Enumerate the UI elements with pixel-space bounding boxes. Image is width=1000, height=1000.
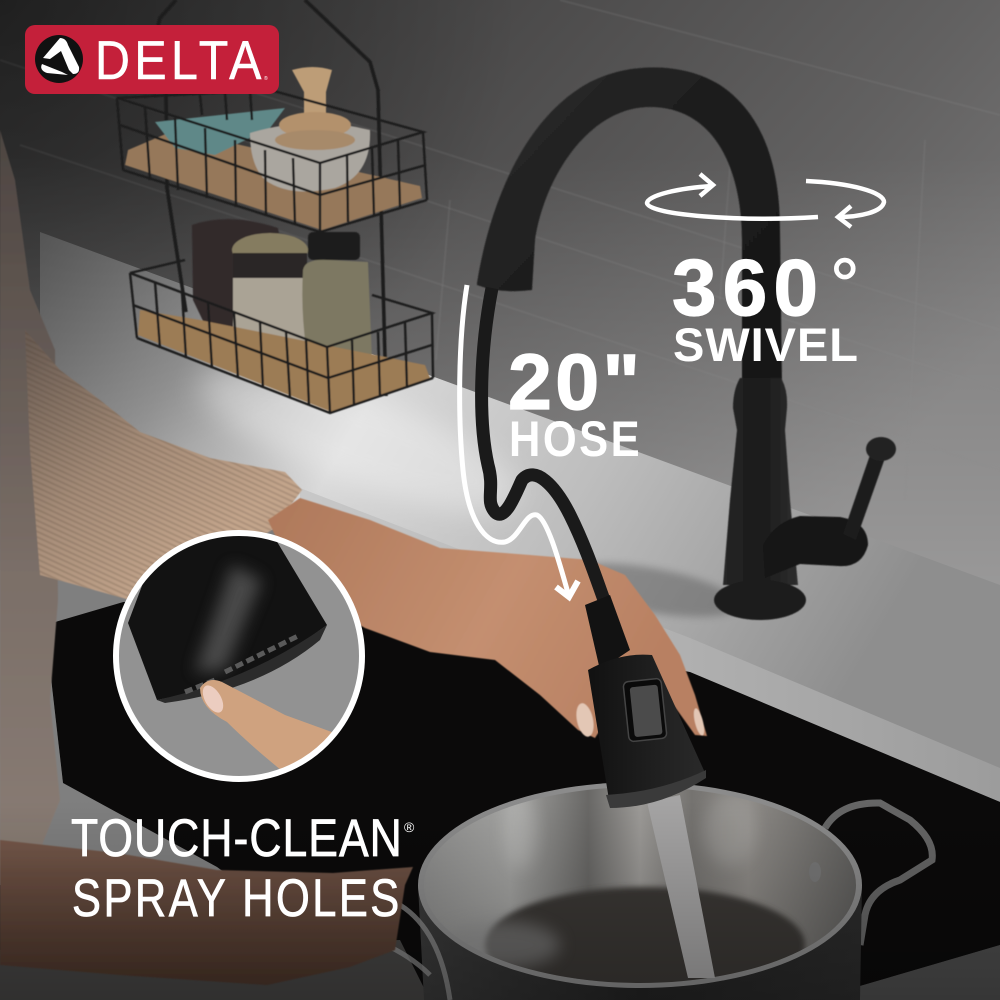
pot rivet — [809, 862, 821, 882]
pot handle right — [825, 803, 932, 945]
spice jar — [302, 232, 372, 372]
sprayer head — [588, 655, 706, 806]
feature label: 360 swivel — [672, 243, 860, 371]
collar and neck — [723, 378, 798, 585]
feature label: 20 inch hose — [508, 337, 642, 467]
dark jar — [192, 219, 280, 330]
water — [474, 796, 808, 983]
feature label: 360 swivel: 360 — [672, 243, 818, 332]
handle hub — [763, 516, 868, 578]
faucet body — [477, 67, 896, 620]
feature label: 360 swivel: ° — [830, 243, 860, 326]
pot rim — [418, 782, 862, 988]
lower left counter — [0, 570, 240, 885]
storage rack — [117, 0, 433, 413]
upper shelf board — [125, 130, 422, 230]
callout: spray holes close-up — [116, 530, 362, 779]
spray holes — [185, 635, 300, 692]
lever knob — [866, 437, 896, 461]
callout ring — [116, 533, 362, 779]
feature label: 360 swivel: SWIVEL — [673, 318, 858, 371]
feature label: touch-clean spray holes — [71, 809, 415, 928]
logo wordmark: DELTA — [95, 29, 266, 91]
spout — [477, 67, 782, 385]
pot interior — [424, 787, 856, 983]
logo mark — [35, 35, 83, 83]
base ring — [714, 580, 806, 620]
sweater torso — [0, 130, 60, 870]
upper shelf wires — [117, 90, 427, 232]
sink basin — [45, 600, 1000, 1000]
hose length arrow — [460, 285, 578, 597]
lower right counter corner — [850, 945, 1000, 1000]
arm — [268, 498, 707, 738]
lower forearm and gripping hand — [0, 840, 413, 985]
finger nail — [202, 685, 224, 713]
feature label: 20 inch hose: HOSE — [509, 411, 642, 467]
feature label: touch-clean spray holes: SPRAY HOLES — [72, 869, 402, 928]
feature label: touch-clean spray holes: TOUCH-CLEAN — [71, 809, 403, 868]
Delta logo — [25, 25, 279, 94]
finger nail — [692, 707, 706, 737]
water stream — [647, 795, 715, 978]
bottom shading — [0, 800, 1000, 1000]
nozzle highlight — [195, 565, 262, 672]
spray face — [157, 625, 327, 703]
lower shelf board — [138, 310, 430, 412]
swivel arrows — [647, 174, 884, 227]
pot — [345, 782, 932, 1000]
finger — [200, 680, 332, 769]
callout backdrop — [117, 534, 361, 778]
pull-down sprayer — [585, 595, 706, 808]
left pot handle — [345, 905, 450, 1000]
cream label jar — [232, 233, 308, 356]
top left vignette — [0, 0, 520, 480]
braided hose — [482, 288, 604, 600]
spray head close-up — [128, 530, 327, 700]
bottom left floor shade — [0, 940, 430, 1000]
thumb nail — [574, 702, 596, 738]
logo badge — [25, 25, 279, 94]
bowl — [250, 123, 370, 192]
sweater sleeve — [25, 330, 302, 600]
rack handle and poles — [157, 0, 386, 396]
sleeve knit texture — [25, 330, 302, 600]
scrub brush — [275, 67, 355, 150]
hand and arm holding sprayer — [268, 498, 707, 738]
rocker button — [623, 678, 667, 742]
lower shelf wires — [130, 260, 433, 413]
background wall — [0, 0, 1000, 620]
teal whisk — [155, 108, 285, 155]
sprayer neck — [585, 595, 630, 670]
feature label: touch-clean spray holes: ® — [404, 819, 415, 835]
pot exterior — [418, 885, 862, 1000]
feature label: 20 inch hose: 20" — [508, 337, 640, 426]
sprayer rim — [606, 770, 706, 808]
sweater body and sleeve — [0, 130, 302, 870]
lever — [843, 455, 885, 540]
registered mark: ® — [264, 75, 268, 82]
countertop — [40, 232, 1000, 802]
